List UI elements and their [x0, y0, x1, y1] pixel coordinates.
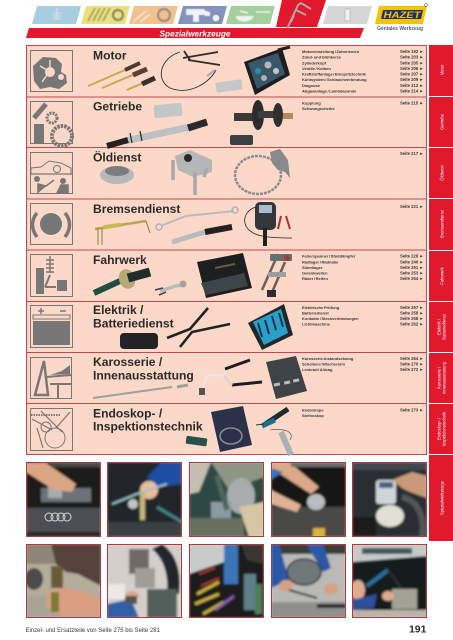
list: Motor topics: Abgasanlage / Lambdasonde	[302, 88, 357, 93]
list: Karosserie topics	[302, 356, 423, 372]
heading: Elektrik /	[93, 303, 144, 317]
side tabs: Bremsendienst	[440, 209, 444, 238]
photo: pressure gauge hose	[107, 462, 182, 537]
photo: hands on engine	[271, 462, 346, 537]
heading: Bremsendienst	[93, 202, 180, 216]
list: Getriebe topics: Kupplung	[302, 100, 321, 106]
list: Endoskop topics: Stethoskop	[302, 413, 324, 418]
heading: Innenausstattung	[93, 368, 194, 382]
tool: black case	[197, 253, 252, 298]
row: Öldienst	[30, 149, 423, 195]
photo: wheel bearing tool	[189, 462, 264, 537]
tool: grey case	[266, 356, 307, 399]
tool: riveter	[199, 360, 262, 395]
tool: ring spanner	[156, 207, 238, 230]
tab: green	[226, 6, 275, 24]
footer note: Einzel- und Ersatzteile von Seite 275 bis Seite 281	[26, 628, 161, 634]
heading: Inspektionstechnik	[93, 420, 203, 434]
list: Fahrwerk topics: Seite 251 ►	[400, 265, 423, 270]
tool: open spanner	[155, 280, 186, 295]
list: Elektrik topics: Seite 262 ►	[400, 322, 423, 327]
icon: engine	[30, 50, 72, 92]
heading: Fahrwerk	[93, 253, 147, 267]
tool: chain wrench	[235, 149, 290, 194]
section title bar: Spezialwerkzeuge	[159, 28, 231, 38]
list: Motor topics: Seite 206 ►	[400, 66, 423, 71]
list: Motor topics	[302, 49, 423, 93]
tool: green compressor	[94, 267, 150, 293]
list: Karosserie topics: Seite 270 ►	[400, 362, 423, 366]
side tabs: Elektrik /	[436, 318, 442, 335]
icon: gears	[30, 102, 72, 146]
side tabs: Öldienst	[440, 164, 444, 181]
tool: brake fluid tester	[245, 202, 292, 246]
list: Motor topics: Kühlsystem / Schlauchverbindung	[302, 77, 367, 82]
list: Motor topics: Motoreinstellung / Zahnriemen	[302, 49, 360, 54]
icon: pipes	[30, 408, 72, 450]
list: Motor topics: Seite 207 ►	[400, 72, 423, 76]
side tabs: Endoskop- /	[436, 417, 442, 440]
tab: blue	[32, 6, 81, 24]
tool: green device	[186, 436, 207, 446]
heading: Karosserie /	[93, 355, 163, 369]
list: Bremsendienst page: Seite 221 ►	[400, 204, 423, 209]
tool: hose pliers	[161, 51, 243, 93]
heading: Motor	[93, 48, 127, 62]
icon: car body tools	[30, 358, 72, 398]
tool: cup wrench	[100, 166, 134, 184]
logo: HAZET	[375, 4, 428, 24]
list: Motor topics: Seite 214 ►	[400, 88, 423, 93]
header: category navigation tabs	[32, 0, 372, 29]
list: Getriebe topics	[302, 100, 423, 111]
icon: brake symbol	[30, 204, 72, 244]
tool: gold rods	[88, 63, 155, 90]
tab: grey	[323, 6, 372, 24]
tool: long rod	[93, 385, 188, 398]
list: Elektrik topics: Elektrische Prüfung	[302, 305, 340, 310]
tool: three-leg wrench	[173, 150, 212, 195]
side tabs: Inspektionstechnik	[442, 411, 446, 446]
list: Motor topics: Seite 205 ►	[400, 60, 423, 65]
list: Öldienst page: Seite 217 ►	[400, 151, 423, 156]
logo tagline: Geniales Werkzeug	[377, 26, 423, 32]
row: Fahrwerk	[30, 253, 423, 298]
list: Motor topics: Seite 203 ►	[400, 55, 423, 60]
heading: Öldienst	[93, 150, 141, 164]
list: Fahrwerk topics: Räder / Reifen	[302, 276, 328, 281]
photo: brake fluid test	[352, 462, 427, 537]
heading: Getriebe	[93, 100, 142, 114]
list: Elektrik topics: Kontakte / Steckverbindungen	[302, 316, 359, 321]
list: Motor topics: Zylinderkopf	[302, 60, 327, 65]
list: Motor topics: Seite 212 ►	[400, 83, 423, 88]
tab: active red with caliper	[276, 0, 326, 29]
tool: blue case	[248, 304, 293, 350]
list: Karosserie topics: Seite 272 ►	[400, 367, 423, 372]
tab: yellow	[81, 6, 130, 24]
list: Fahrwerk topics: Seite 228 ►	[400, 254, 423, 259]
photo: headlight adjustment	[271, 544, 346, 618]
tool: black pouch	[120, 333, 158, 349]
list: Elektrik topics: Seite 258 ►	[400, 310, 423, 316]
heading: Endoskop- /	[93, 406, 163, 420]
tool: flywheel lock	[230, 100, 293, 145]
row: Getriebe	[30, 100, 423, 146]
icon: suspension	[30, 254, 72, 296]
side tabs: Karosserie /	[436, 366, 442, 389]
tool: wire pliers	[167, 308, 230, 347]
list: Fahrwerk topics: Seite 254 ►	[400, 276, 423, 281]
list: Karosserie topics: Lenkrad / Airbag	[302, 367, 333, 372]
list: Endoskop topics: Endoskope	[302, 407, 324, 412]
side tabs: Innenausstattung	[442, 361, 446, 394]
list: Elektrik topics: Seite 258 ►	[400, 316, 423, 321]
heading: Batteriedienst	[93, 316, 174, 330]
page number: 191	[409, 624, 427, 636]
list: Elektrik topics: Seite 257 ►	[400, 305, 423, 310]
row: Karosserie / Innenausstattung	[30, 355, 423, 399]
heading	[93, 406, 203, 434]
list: Motor topics: Kraftstoffanlage / Einspritztechnik	[302, 72, 367, 76]
list: Motor topics: Seite 192 ►	[400, 49, 423, 54]
tool: silver sleeve	[154, 103, 183, 118]
row: Bremsendienst	[30, 202, 423, 246]
list: Fahrwerk topics: Silentlager	[302, 265, 323, 270]
row: Endoskop- / Inspektionstechnik	[30, 406, 423, 455]
list: Fahrwerk topics: Gelenkwellen	[302, 270, 328, 276]
list: Karosserie topics: Scheiben / Wischerarm	[302, 362, 345, 366]
side tabs: Fahrwerk	[440, 266, 444, 285]
row: Elektrik / Batteriedienst	[30, 303, 423, 350]
list: Motor topics: Diagnose	[302, 83, 321, 88]
list: Fahrwerk topics: Radlager / Radnabe	[302, 259, 339, 264]
tab: dark blue	[178, 6, 227, 24]
list: Elektrik topics: Lichtmaschine	[302, 322, 331, 327]
list: Motor topics: Zünd- und Glühkerze	[302, 55, 342, 60]
photo: wheel hub	[26, 544, 101, 618]
panel: contents table background	[26, 46, 427, 454]
side tabs: Getriebe	[440, 113, 444, 130]
tool: socket screwdriver	[172, 227, 232, 242]
icon: car and mechanic	[30, 152, 72, 194]
photo: wheel arch spring	[107, 544, 182, 618]
list: Elektrik topics	[302, 305, 423, 327]
photo: endoscope under hood	[352, 544, 427, 618]
list: Fahrwerk topics	[302, 254, 423, 281]
list: Endoskop topics	[302, 407, 423, 418]
side tabs: Spezialwerkzeuge	[440, 480, 444, 515]
list: Karosserie topics: Seite 264 ►	[400, 356, 423, 361]
side tabs: Motor	[440, 64, 444, 75]
list: Getriebe topics: Schwungscheibe	[302, 106, 335, 111]
photo: fuse box wiring	[189, 544, 264, 618]
tool: spring compressor	[262, 254, 292, 297]
icon: battery	[30, 306, 72, 348]
tool: stethoscope	[256, 409, 291, 455]
list: Fahrwerk topics: Federspanner / Stoßdämpfer	[302, 254, 356, 259]
side tabs	[429, 45, 453, 541]
section title bar	[26, 28, 364, 38]
list: Fahrwerk topics: Seite 240 ►	[400, 259, 423, 264]
list: Fahrwerk topics: Seite 253 ►	[400, 270, 423, 276]
side tabs: Batteriedienst	[442, 313, 446, 340]
list: Motor topics: Seite 209 ►	[400, 77, 423, 82]
list: Endoskop topics: Seite 273 ►	[400, 407, 423, 412]
heading	[93, 355, 194, 382]
list: Karosserie topics: Karosserie-Instandsetzung	[302, 356, 354, 361]
photo: audi engine	[26, 462, 101, 537]
logo: HAZET: HAZET	[384, 10, 422, 20]
list: Getriebe topics: Seite 215 ►	[400, 100, 423, 106]
tool: endoscope case	[211, 406, 252, 452]
list: Motor topics: Ventile / Kolben	[302, 66, 331, 71]
row: Motor	[30, 47, 423, 95]
tool: service case	[244, 47, 290, 95]
tool: long puller	[107, 122, 207, 146]
tab: orange	[129, 6, 178, 24]
list: Elektrik topics: Batteriedienst	[302, 310, 329, 316]
heading	[93, 303, 174, 330]
tool: brake gauge	[95, 221, 150, 245]
